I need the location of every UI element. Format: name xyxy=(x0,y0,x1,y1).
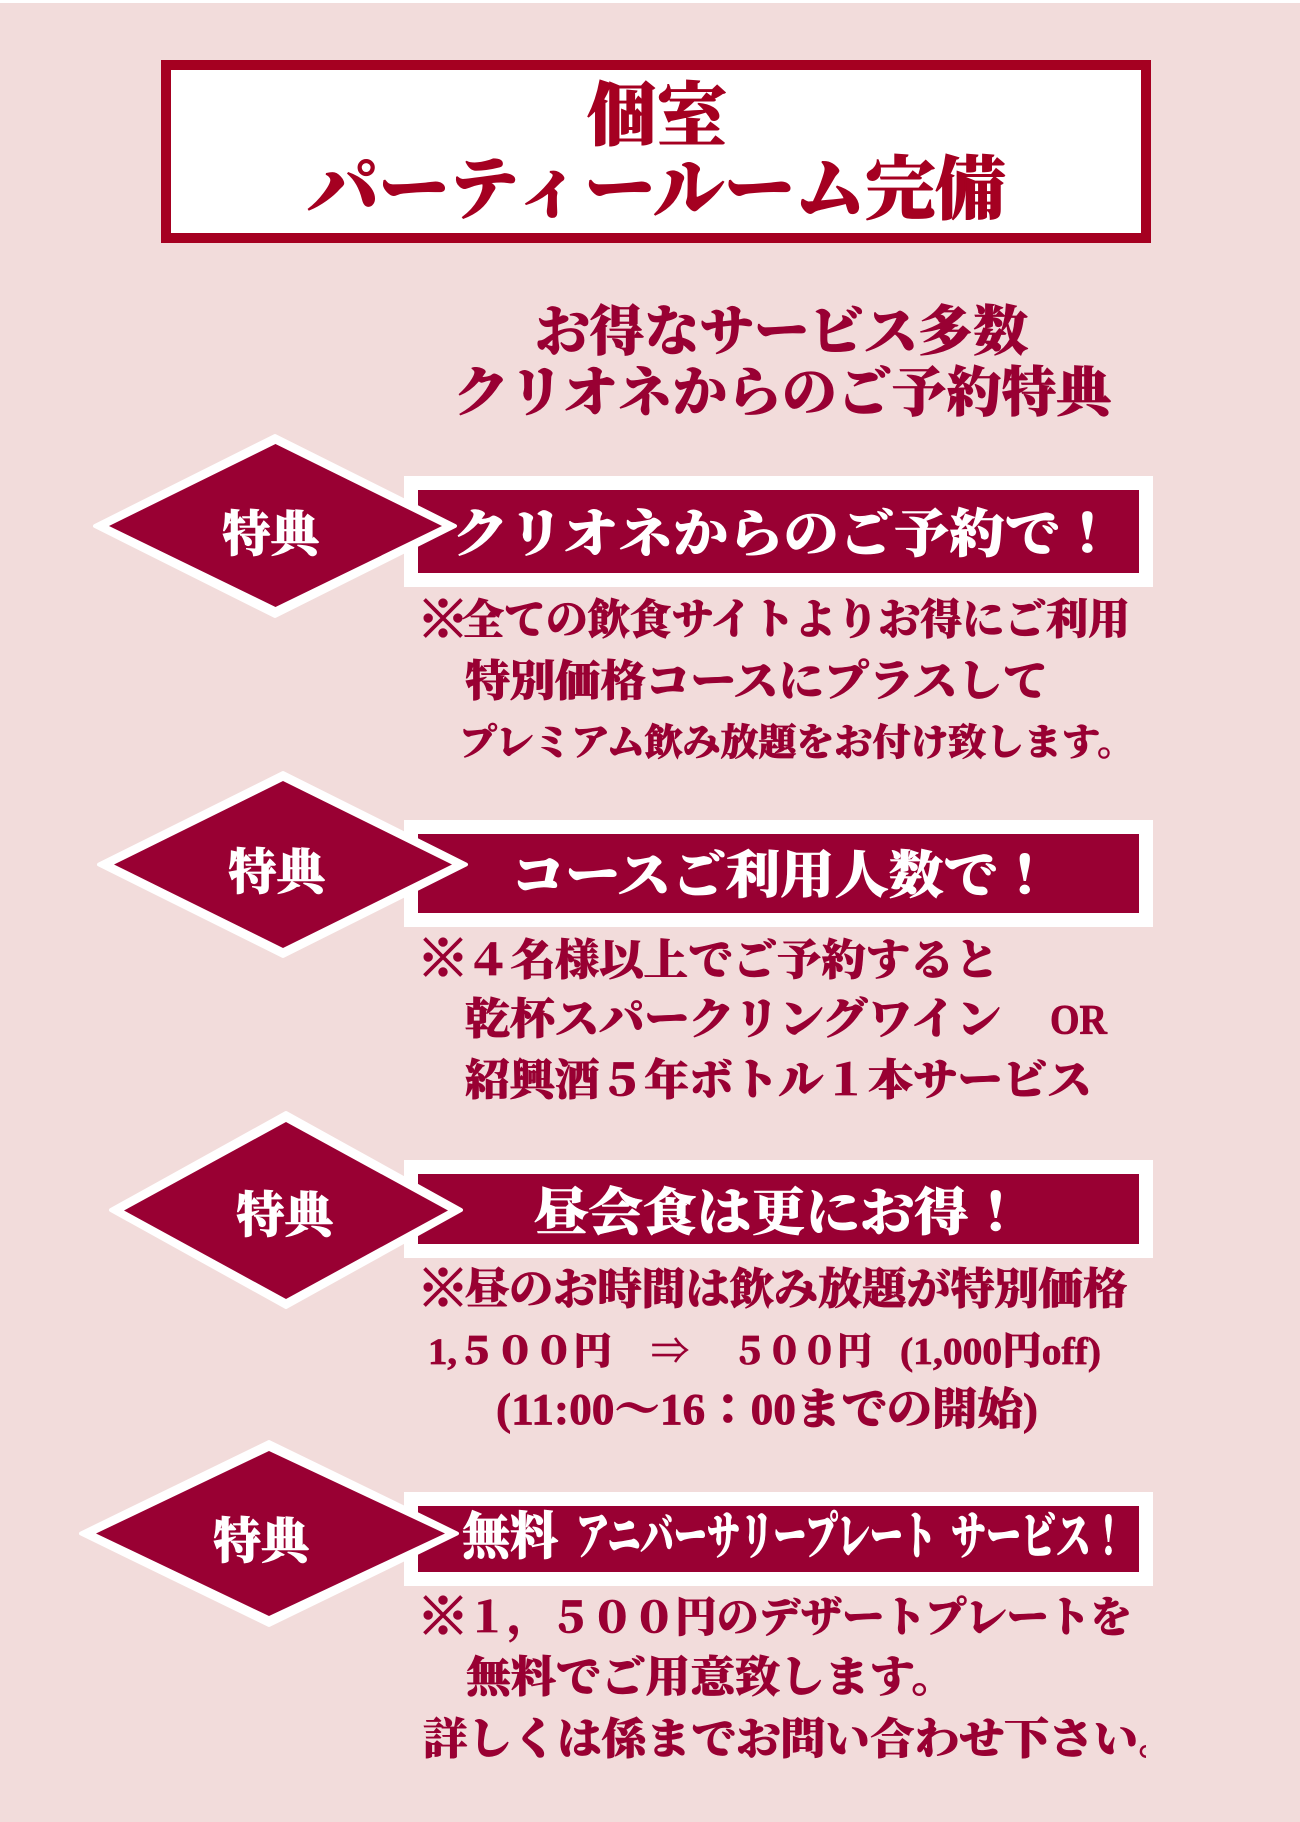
note text 2: ※ xyxy=(417,932,469,989)
note text 2: 乾杯スパークリングワイン xyxy=(465,996,1001,1044)
badge 1 xyxy=(95,436,455,616)
note text 3: (1,000円off) xyxy=(900,1331,1101,1373)
badge 4 xyxy=(81,1442,457,1625)
note text 3: 1,５００円 xyxy=(428,1332,612,1373)
title xyxy=(308,78,1006,228)
note text 2: 紹興酒５年ボトル１本サービス xyxy=(465,1057,1092,1105)
subheading: クリオネからのご予約特典 xyxy=(454,363,1120,423)
banner 1 xyxy=(404,476,1153,587)
banner 1: クリオネからのご予約で！ xyxy=(453,506,1115,564)
note text 1 xyxy=(417,593,1135,764)
badge 3: 特典 xyxy=(236,1188,342,1243)
note text 4: 詳しくは係までお問い合わせ下さい。 xyxy=(423,1716,1183,1764)
badge 3 xyxy=(111,1113,461,1307)
note text 3: 昼のお時間は飲み放題が特別価格 xyxy=(465,1266,1127,1314)
panel: benefit 4 xyxy=(81,1442,1183,1764)
note text 4 xyxy=(423,1595,1146,1758)
panel: benefit 1 xyxy=(95,436,1153,764)
banner 4 xyxy=(404,1492,1153,1586)
badge 1: 特典 xyxy=(222,507,328,562)
panel: benefit 2 xyxy=(99,773,1153,1105)
note text 4: １，５００円のデザートプレートを xyxy=(466,1595,1132,1643)
note text 3: ５００円 xyxy=(732,1332,872,1373)
note text 1: ※ xyxy=(417,593,469,650)
badge 2: 特典 xyxy=(228,845,334,900)
note text 2 xyxy=(417,932,1108,1105)
banner 2 xyxy=(404,820,1153,927)
badge 2 xyxy=(99,773,466,956)
note text 3: (11:00～16：00までの開始) xyxy=(496,1385,1038,1434)
banner 3: 昼会食は更にお得！ xyxy=(534,1185,1023,1242)
title: 個室 xyxy=(587,78,727,154)
subheading xyxy=(454,302,1120,423)
banner 4: サービス！ xyxy=(951,1510,1126,1566)
note text 3: ⇒ xyxy=(651,1331,689,1373)
note text 2: ４名様以上でご予約すると xyxy=(466,937,999,985)
note text 3 xyxy=(417,1262,1127,1434)
note text 1: 特別価格コースにプラスして xyxy=(465,658,1048,706)
note text 2: OR xyxy=(1050,998,1108,1044)
panel: benefit 3 xyxy=(111,1113,1153,1434)
subheading: お得なサービス多数 xyxy=(535,302,1028,362)
banner 4: 無料 xyxy=(462,1509,558,1566)
title: パーティールーム完備 xyxy=(308,152,1006,228)
note text 4: 無料でご用意致します。 xyxy=(466,1654,956,1702)
note text 3: ※ xyxy=(417,1262,469,1319)
note text 1: 全ての飲食サイトよりお得にご利用 xyxy=(462,597,1130,644)
panel: title box xyxy=(166,65,1146,238)
banner 3 xyxy=(404,1160,1153,1258)
badge 4: 特典 xyxy=(213,1514,318,1569)
note text 4: ※ xyxy=(417,1590,469,1647)
note text 1: プレミアム飲み放題をお付け致します。 xyxy=(459,722,1135,764)
banner 4: アニバーサリープレート xyxy=(576,1509,936,1566)
banner 2: コースご利用人数で！ xyxy=(511,848,1052,905)
